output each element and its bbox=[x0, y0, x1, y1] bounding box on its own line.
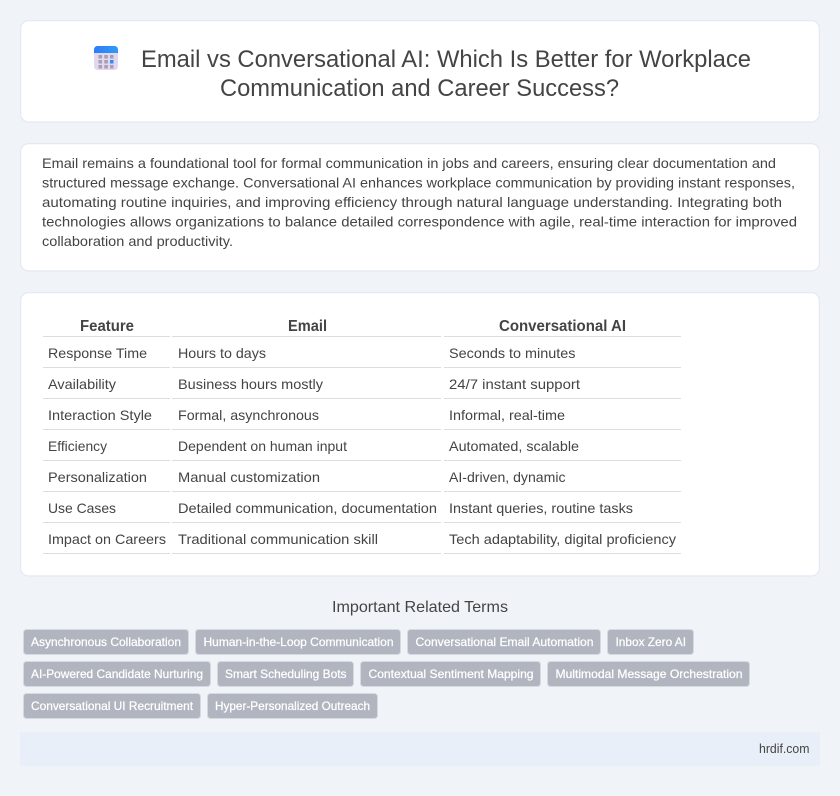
tag bbox=[24, 694, 200, 718]
row: use cases: Instant queries, routine tasks bbox=[449, 500, 633, 516]
tag: Smart Scheduling Bots bbox=[225, 667, 346, 681]
row: efficiency: Automated, scalable bbox=[449, 438, 579, 454]
intro paragraph: technologies allows organizations to balance detailed correspondence with agile, real-time interaction for improved bbox=[42, 214, 797, 230]
tag bbox=[548, 662, 750, 686]
tag bbox=[408, 630, 600, 654]
tag: Conversational UI Recruitment bbox=[31, 699, 194, 713]
row: personalization: Manual customization bbox=[178, 469, 320, 485]
title: Email vs Conversational AI: Which Is Better for Workplace bbox=[141, 46, 751, 73]
tag bbox=[360, 662, 540, 686]
row: response time: Response Time bbox=[48, 345, 147, 361]
tag: Contextual Sentiment Mapping bbox=[368, 667, 534, 681]
tag: AI-Powered Candidate Nurturing bbox=[31, 667, 203, 681]
row: impact on careers: Impact on Careers bbox=[48, 531, 166, 547]
tag bbox=[208, 694, 378, 718]
title bbox=[141, 46, 751, 102]
row: personalization bbox=[48, 469, 566, 485]
tag: Asynchronous Collaboration bbox=[31, 635, 181, 649]
tag bbox=[196, 630, 400, 654]
row: interaction style: Formal, asynchronous bbox=[178, 407, 319, 423]
intro paragraph: collaboration and productivity. bbox=[42, 233, 233, 249]
tag: Human-in-the-Loop Communication bbox=[204, 635, 394, 649]
row: availability: 24/7 instant support bbox=[449, 376, 580, 392]
panel: comparison table bbox=[21, 293, 819, 576]
row: impact on careers: Tech adaptability, digital proficiency bbox=[449, 531, 676, 547]
tag bbox=[608, 630, 694, 654]
row: availability: Business hours mostly bbox=[178, 376, 323, 392]
panel: intro text bbox=[21, 144, 819, 271]
table header row: Email bbox=[288, 318, 327, 335]
table header row bbox=[80, 318, 626, 335]
row: personalization: Personalization bbox=[48, 469, 147, 485]
row: response time bbox=[48, 345, 576, 361]
tag bbox=[24, 662, 210, 686]
related term tags bbox=[24, 630, 750, 718]
intro paragraph: Email remains a foundational tool for formal communication in jobs and careers, ensuring clear documentation and bbox=[42, 155, 776, 171]
row: efficiency bbox=[48, 438, 579, 454]
heading: related terms: Important Related Terms bbox=[332, 599, 508, 616]
row: use cases: Use Cases bbox=[48, 500, 116, 516]
tag bbox=[218, 662, 354, 686]
row: availability bbox=[48, 376, 580, 392]
tag bbox=[24, 630, 188, 654]
icon: calendar bbox=[94, 46, 118, 70]
row: interaction style: Interaction Style bbox=[48, 407, 152, 423]
row: impact on careers: Traditional communication skill bbox=[178, 531, 378, 547]
row: response time: Seconds to minutes bbox=[449, 345, 576, 361]
row: efficiency: Efficiency bbox=[48, 438, 107, 454]
intro paragraph: automating routine inquiries, and improving efficiency through natural language understanding. Integrating both bbox=[42, 194, 782, 210]
title: Communication and Career Success? bbox=[220, 75, 619, 102]
row: response time: Hours to days bbox=[178, 345, 266, 361]
tag: Conversational Email Automation bbox=[416, 635, 594, 649]
table header row: Feature bbox=[80, 318, 134, 335]
footer: hrdif.com bbox=[759, 741, 810, 756]
intro paragraph bbox=[42, 155, 797, 249]
row: impact on careers bbox=[48, 531, 676, 547]
row: availability: Availability bbox=[48, 376, 116, 392]
row: interaction style bbox=[48, 407, 565, 423]
row: personalization: AI-driven, dynamic bbox=[449, 469, 566, 485]
tag: Multimodal Message Orchestration bbox=[556, 667, 742, 681]
row: efficiency: Dependent on human input bbox=[178, 438, 347, 454]
row: use cases bbox=[48, 500, 633, 516]
panel: header bbox=[21, 21, 819, 122]
intro paragraph: structured message exchange. Conversational AI enhances workplace communication by providing instant responses, bbox=[42, 174, 795, 190]
row: use cases: Detailed communication, documentation bbox=[178, 500, 437, 516]
tag: Hyper-Personalized Outreach bbox=[215, 699, 370, 713]
table header row: Conversational AI bbox=[499, 318, 626, 335]
tag: Inbox Zero AI bbox=[616, 635, 686, 649]
footer bbox=[20, 732, 820, 766]
row: interaction style: Informal, real-time bbox=[449, 407, 565, 423]
